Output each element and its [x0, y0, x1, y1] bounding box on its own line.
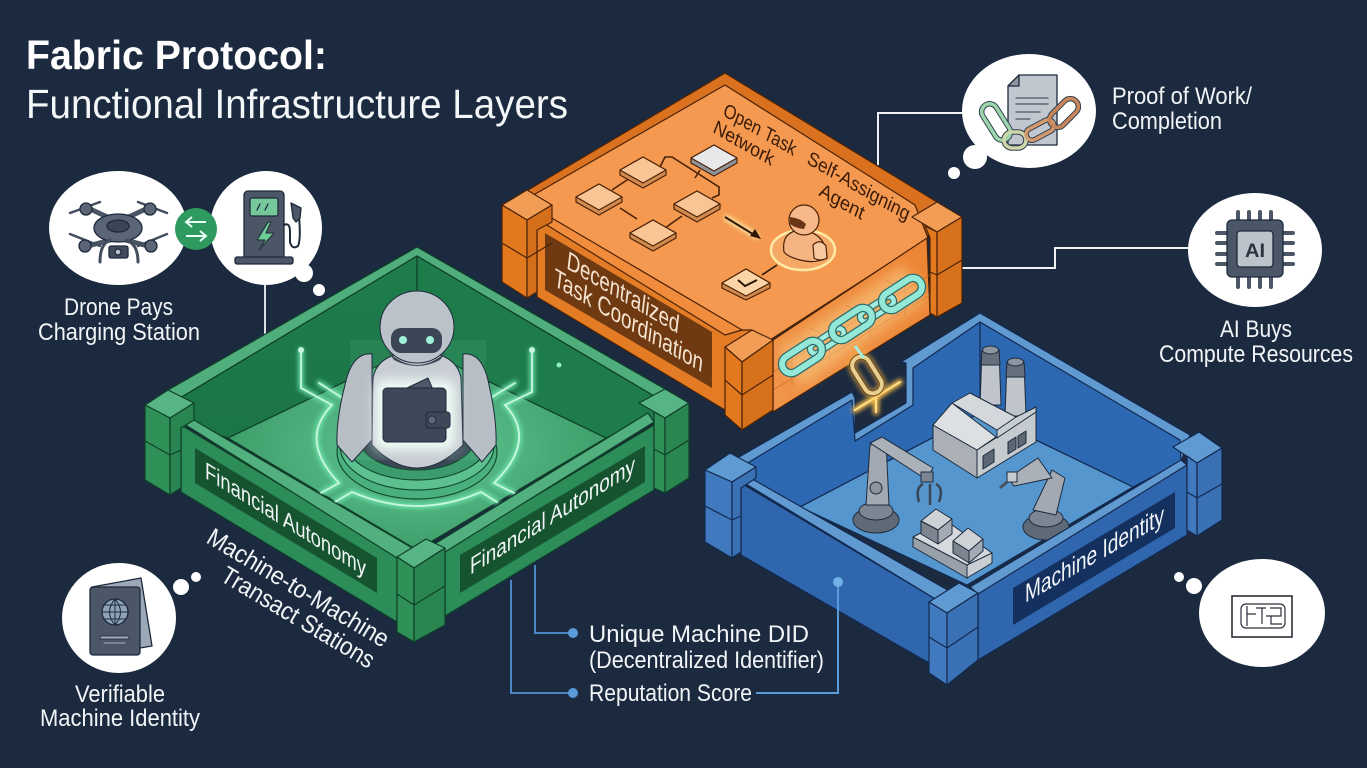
factory: [933, 346, 1036, 478]
task arrow: [725, 217, 761, 239]
green floor: [228, 347, 606, 550]
chimneys: [980, 346, 1026, 416]
floor label: self-assigning agent: Self-Assigning: [804, 147, 913, 226]
green right wall: Financial Autonomy: [470, 450, 636, 580]
robot head: [380, 291, 454, 363]
label: verifiable machine identity: [40, 681, 200, 732]
robot arms: [337, 354, 372, 462]
label: AI buys compute: [1159, 316, 1353, 368]
label: proof of work: Proof of Work/: [1112, 83, 1252, 110]
label: reputation score: Reputation Score: [589, 680, 752, 707]
icon: chain: [979, 95, 1082, 148]
label: AI buys compute: AI Buys: [1220, 316, 1292, 343]
wallet: [383, 378, 450, 442]
callout: verifiable machine identity: [62, 563, 201, 673]
orange floor: [530, 85, 928, 340]
flow nodes: [576, 145, 737, 251]
green right wall: [428, 413, 654, 616]
icon: drone: [70, 202, 167, 262]
floor label: self-assigning agent: Agent: [816, 179, 868, 225]
panel: green layer, financial autonomy: [145, 247, 689, 642]
icon: charging pump: [235, 191, 301, 264]
title: [26, 32, 568, 127]
panel: blue layer, machine identity: [705, 313, 1222, 685]
corner block right: [912, 202, 962, 317]
connector: reputation score left: [511, 580, 578, 698]
green back walls and rim: [168, 247, 665, 438]
green corner block front: [397, 539, 445, 642]
title: Fabric Protocol:: [26, 32, 327, 78]
label: unique machine DID: [589, 621, 824, 674]
callout: proof of work: [948, 54, 1096, 179]
green left wall: [181, 416, 414, 622]
right wall label: [1013, 492, 1175, 625]
circuit glow lines: [298, 347, 562, 506]
panel: orange layer, decentralized task coordination: [502, 73, 962, 430]
label: unique machine DID: Unique Machine DID: [589, 621, 809, 648]
callout: drone and charging exchange: [49, 171, 325, 296]
label: drone pays: Charging Station: [38, 319, 200, 346]
corner block left: [502, 190, 552, 298]
orange left wall: [537, 214, 752, 410]
wall label text: Task Coordination: [552, 264, 705, 378]
robot body: [372, 352, 463, 468]
factory building: [933, 393, 1036, 478]
label: machine-to-machine transact stations: Machine-to-Machine: [202, 523, 394, 653]
label: drone pays: Drone Pays: [64, 294, 173, 321]
completed check task: [722, 265, 777, 300]
robot with wallet: [337, 291, 496, 468]
callout: machine ID card: [1174, 559, 1325, 667]
oval links: [779, 274, 925, 377]
green left wall: Financial Autonomy: [205, 456, 367, 583]
corner block front: [725, 330, 773, 430]
blue right wall: [970, 460, 1187, 660]
blue corner block front: [929, 583, 978, 685]
icon: chip card: [1232, 596, 1292, 637]
chain: connecting layers: [779, 274, 925, 377]
blue corner block left: [705, 453, 756, 558]
label: machine-to-machine transact stations: Transact Stations: [216, 561, 380, 674]
callout: AI compute: [1188, 193, 1322, 307]
label: proof of work: Completion: [1112, 108, 1222, 135]
blue left wall: [741, 476, 960, 663]
robotic arm left: [853, 437, 941, 533]
orange wall label: [545, 233, 712, 388]
label: unique machine DID: (Decentralized Identifier): [589, 647, 824, 674]
icon: passport: [90, 578, 152, 655]
connector: unique machine DID: [535, 565, 578, 638]
concentric base rings: [337, 400, 497, 499]
icon: document: [1008, 75, 1057, 145]
robotic arm right: [1000, 458, 1069, 540]
left wall label: [195, 448, 377, 593]
gold glowing breach marks: [855, 382, 900, 412]
label: verifiable machine identity: Machine Identity: [40, 705, 200, 732]
label: verifiable machine identity: Verifiable: [75, 681, 165, 708]
callout: AI compute: AI: [1245, 241, 1265, 262]
icon: exchange arrows: [175, 208, 217, 250]
connector: charging station: [264, 284, 266, 338]
blue back rim and walls: [739, 313, 1190, 507]
bubble: drone: [49, 171, 187, 285]
orange back rim: [528, 73, 937, 240]
floor label: open task network: Open Task: [720, 99, 799, 161]
blue corner block right: [1173, 432, 1222, 536]
blue right wall: Machine Identity: [1025, 500, 1164, 609]
self-assigning agent: [771, 205, 835, 270]
icon: AI chip: [1217, 212, 1293, 287]
connector: reputation score right: [756, 577, 843, 693]
title: Functional Infrastructure Layers: [26, 81, 568, 127]
connector: proof of work: [878, 113, 964, 165]
conveyor with boxes: [913, 509, 992, 578]
label: drone pays: [38, 294, 200, 346]
chain glow: [790, 282, 915, 368]
broken gold link: [849, 346, 885, 397]
right wall label: [460, 446, 645, 593]
middle links: [808, 294, 896, 356]
wall label text: Decentralized: [565, 247, 681, 340]
green corner block left: [145, 390, 194, 495]
label: proof of work: [1112, 83, 1252, 135]
bubble: charging station: [210, 171, 322, 285]
orange right brick wall: [773, 238, 930, 412]
connector: AI compute: [960, 248, 1190, 268]
floor label: open task network: Network: [710, 116, 777, 171]
green corner block right: [639, 389, 689, 493]
wallet glow: [375, 380, 455, 450]
blue floor: [800, 413, 1133, 585]
